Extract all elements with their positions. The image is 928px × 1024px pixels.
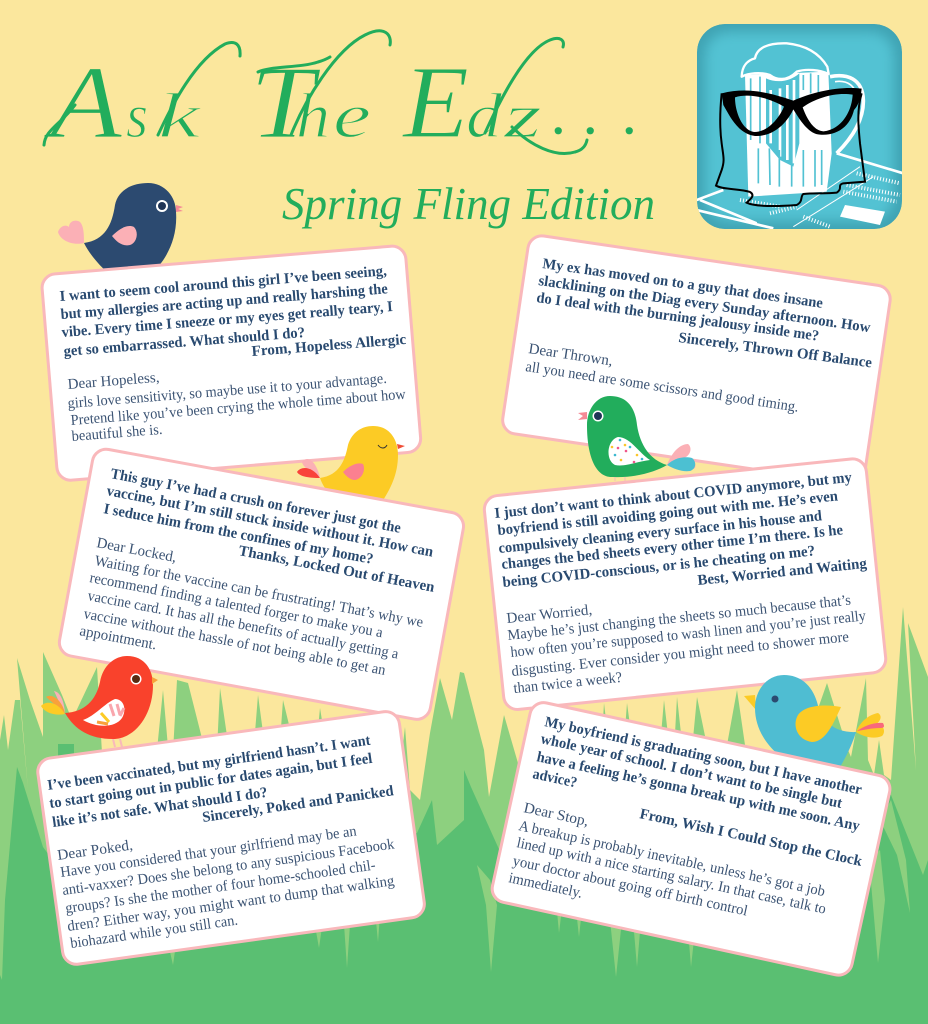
question text: Best, Worried and Waiting bbox=[697, 556, 868, 589]
question text: whole year of school. I don’t want to be single but bbox=[539, 731, 844, 812]
question text: vibe. Every time I sneeze or my eyes get really teary, I bbox=[61, 299, 393, 341]
bird: green bbox=[578, 396, 695, 481]
bird: red bbox=[41, 656, 158, 747]
question text: From, Wish I Could Stop the Clock bbox=[638, 806, 864, 870]
question text: to start going out in public for dates again, but I feel bbox=[48, 751, 373, 812]
question text bbox=[46, 733, 395, 831]
answer text: appointment. bbox=[78, 623, 158, 653]
question text: I just don’t want to think about COVID anymore, but my bbox=[494, 470, 853, 522]
answer text: Dear Thrown, bbox=[527, 341, 614, 370]
answer text: groups? Is she the mother of four home-schooled chil- bbox=[64, 858, 377, 917]
question text: I want to seem cool around this girl I’ve been seeing, bbox=[59, 263, 388, 305]
question text bbox=[535, 256, 873, 371]
panel: locked out of heaven bbox=[57, 447, 466, 722]
title: d bbox=[466, 80, 503, 151]
title bbox=[43, 31, 640, 160]
question text: I’ve been vaccinated, but my girlfriend hasn’t. I want bbox=[46, 733, 371, 794]
answer text: Dear Worried, bbox=[506, 602, 593, 627]
answer text: anti-vaxxer? Does she belong to any suspicious Facebook bbox=[61, 836, 396, 899]
question text: From, Hopeless Allergic bbox=[251, 332, 407, 360]
answer text: Maybe he’s just changing the sheets so much because that’s bbox=[507, 593, 852, 644]
question text: Sincerely, Poked and Panicked bbox=[201, 783, 395, 826]
panel: thrown off balance bbox=[501, 234, 892, 485]
answer text: Pretend like you’ve been crying the whole time about how bbox=[70, 387, 406, 429]
title: s bbox=[126, 80, 148, 151]
answer text: Dear Hopeless, bbox=[67, 370, 160, 393]
answer text: vaccine card. It has all the benefits of actually getting a bbox=[86, 588, 400, 663]
question text bbox=[494, 470, 868, 591]
answer text bbox=[67, 370, 406, 445]
answer text: beautiful she is. bbox=[71, 422, 163, 445]
answer text bbox=[506, 593, 867, 697]
question text: Sincerely, Thrown Off Balance bbox=[677, 330, 873, 371]
question text: advice? bbox=[531, 766, 579, 791]
question text: I seduce him from the confines of my home? bbox=[102, 501, 374, 568]
title: E bbox=[401, 45, 469, 160]
answer text: Dear Locked, bbox=[95, 535, 178, 566]
answer text: dren? Either way, you might want to dump that walking bbox=[66, 873, 396, 935]
answer text: lined up with a nice starting salary. In that case, talk to bbox=[515, 835, 827, 918]
answer text bbox=[78, 535, 425, 679]
answer text: disgusting. Ever consider you might need to shower more bbox=[511, 629, 850, 680]
question text: Thanks, Locked Out of Heaven bbox=[237, 543, 436, 596]
title: T bbox=[250, 45, 321, 160]
question text bbox=[59, 263, 407, 360]
answer text: Dear Poked, bbox=[56, 838, 134, 864]
answer text: Waiting for the vaccine can be frustrating! That’s why we bbox=[93, 553, 425, 631]
question text: do I deal with the burning jealousy inside me? bbox=[535, 290, 820, 345]
title: k bbox=[158, 80, 202, 151]
answer text: than twice a week? bbox=[513, 670, 623, 697]
question text: get so embarrassed. What should I do? bbox=[63, 325, 306, 360]
question text: My ex has moved on to a guy that does insane bbox=[541, 256, 824, 312]
panel: worried and waiting bbox=[483, 458, 887, 711]
title: h bbox=[296, 80, 330, 151]
title: A bbox=[43, 45, 123, 160]
question text: slacklining on the Diag every Sunday afternoon. How bbox=[537, 273, 871, 336]
panel: wish i could stop the clock bbox=[490, 700, 893, 978]
answer text: vaccine without the hassle of not being able to get an bbox=[82, 606, 387, 679]
title: e bbox=[333, 80, 371, 151]
question text bbox=[531, 714, 864, 870]
grass background bbox=[0, 607, 928, 1024]
question text: boyfriend is still avoiding going out with me. He’s even bbox=[497, 488, 839, 539]
question text: compulsively cleaning every surface in his house and bbox=[498, 508, 823, 557]
answer text: girls love sensitivity, so maybe use it to your advantage. bbox=[67, 371, 387, 412]
question text: but my allergies are acting up and really harshing the bbox=[60, 281, 389, 323]
answer text: Have you considered that your girlfriend may be an bbox=[59, 823, 358, 881]
answer text: your doctor about going off birth control bbox=[511, 853, 749, 920]
question text: changes the bed sheets every other time I’m there. Is he bbox=[501, 522, 844, 573]
answer text: immediately. bbox=[507, 870, 584, 902]
answer text bbox=[507, 800, 827, 920]
subtitle: Spring Fling Edition bbox=[282, 178, 655, 229]
answer text: all you need are some scissors and good timing. bbox=[524, 359, 800, 416]
question text: being COVID-conscious, or is he cheating on me? bbox=[502, 543, 816, 591]
question text bbox=[102, 466, 436, 596]
bird: yellow bbox=[297, 426, 405, 505]
panel: hopeless allergic bbox=[41, 245, 422, 481]
bird: navy bbox=[58, 183, 183, 275]
question text: have a feeling he’s gonna break up with me soon. Any bbox=[535, 749, 862, 835]
question text: My boyfriend is graduating soon, but I have another bbox=[543, 714, 864, 798]
question text: This guy I’ve had a crush on forever just got the bbox=[109, 466, 402, 537]
answer text: how often you’re supposed to wash linen and you’re just really bbox=[510, 608, 867, 661]
bird: blue bbox=[744, 675, 884, 775]
answer text: A breakup is probably inevitable, unless he’s got a job bbox=[517, 818, 826, 900]
question text: like it’s not safe. What should I do? bbox=[51, 785, 268, 831]
icon: beer mug with glasses logo bbox=[697, 24, 903, 229]
panel: poked and panicked bbox=[36, 710, 426, 966]
question text: vaccine, but I’m still stuck inside without it. How can bbox=[105, 483, 435, 561]
answer text: Dear Stop, bbox=[522, 800, 590, 830]
title: z bbox=[502, 80, 542, 151]
answer text: recommend finding a talented forger to make you a bbox=[88, 570, 384, 641]
title: ... bbox=[551, 70, 640, 150]
answer text bbox=[56, 823, 396, 952]
answer text: biohazard while you still can. bbox=[69, 913, 239, 952]
